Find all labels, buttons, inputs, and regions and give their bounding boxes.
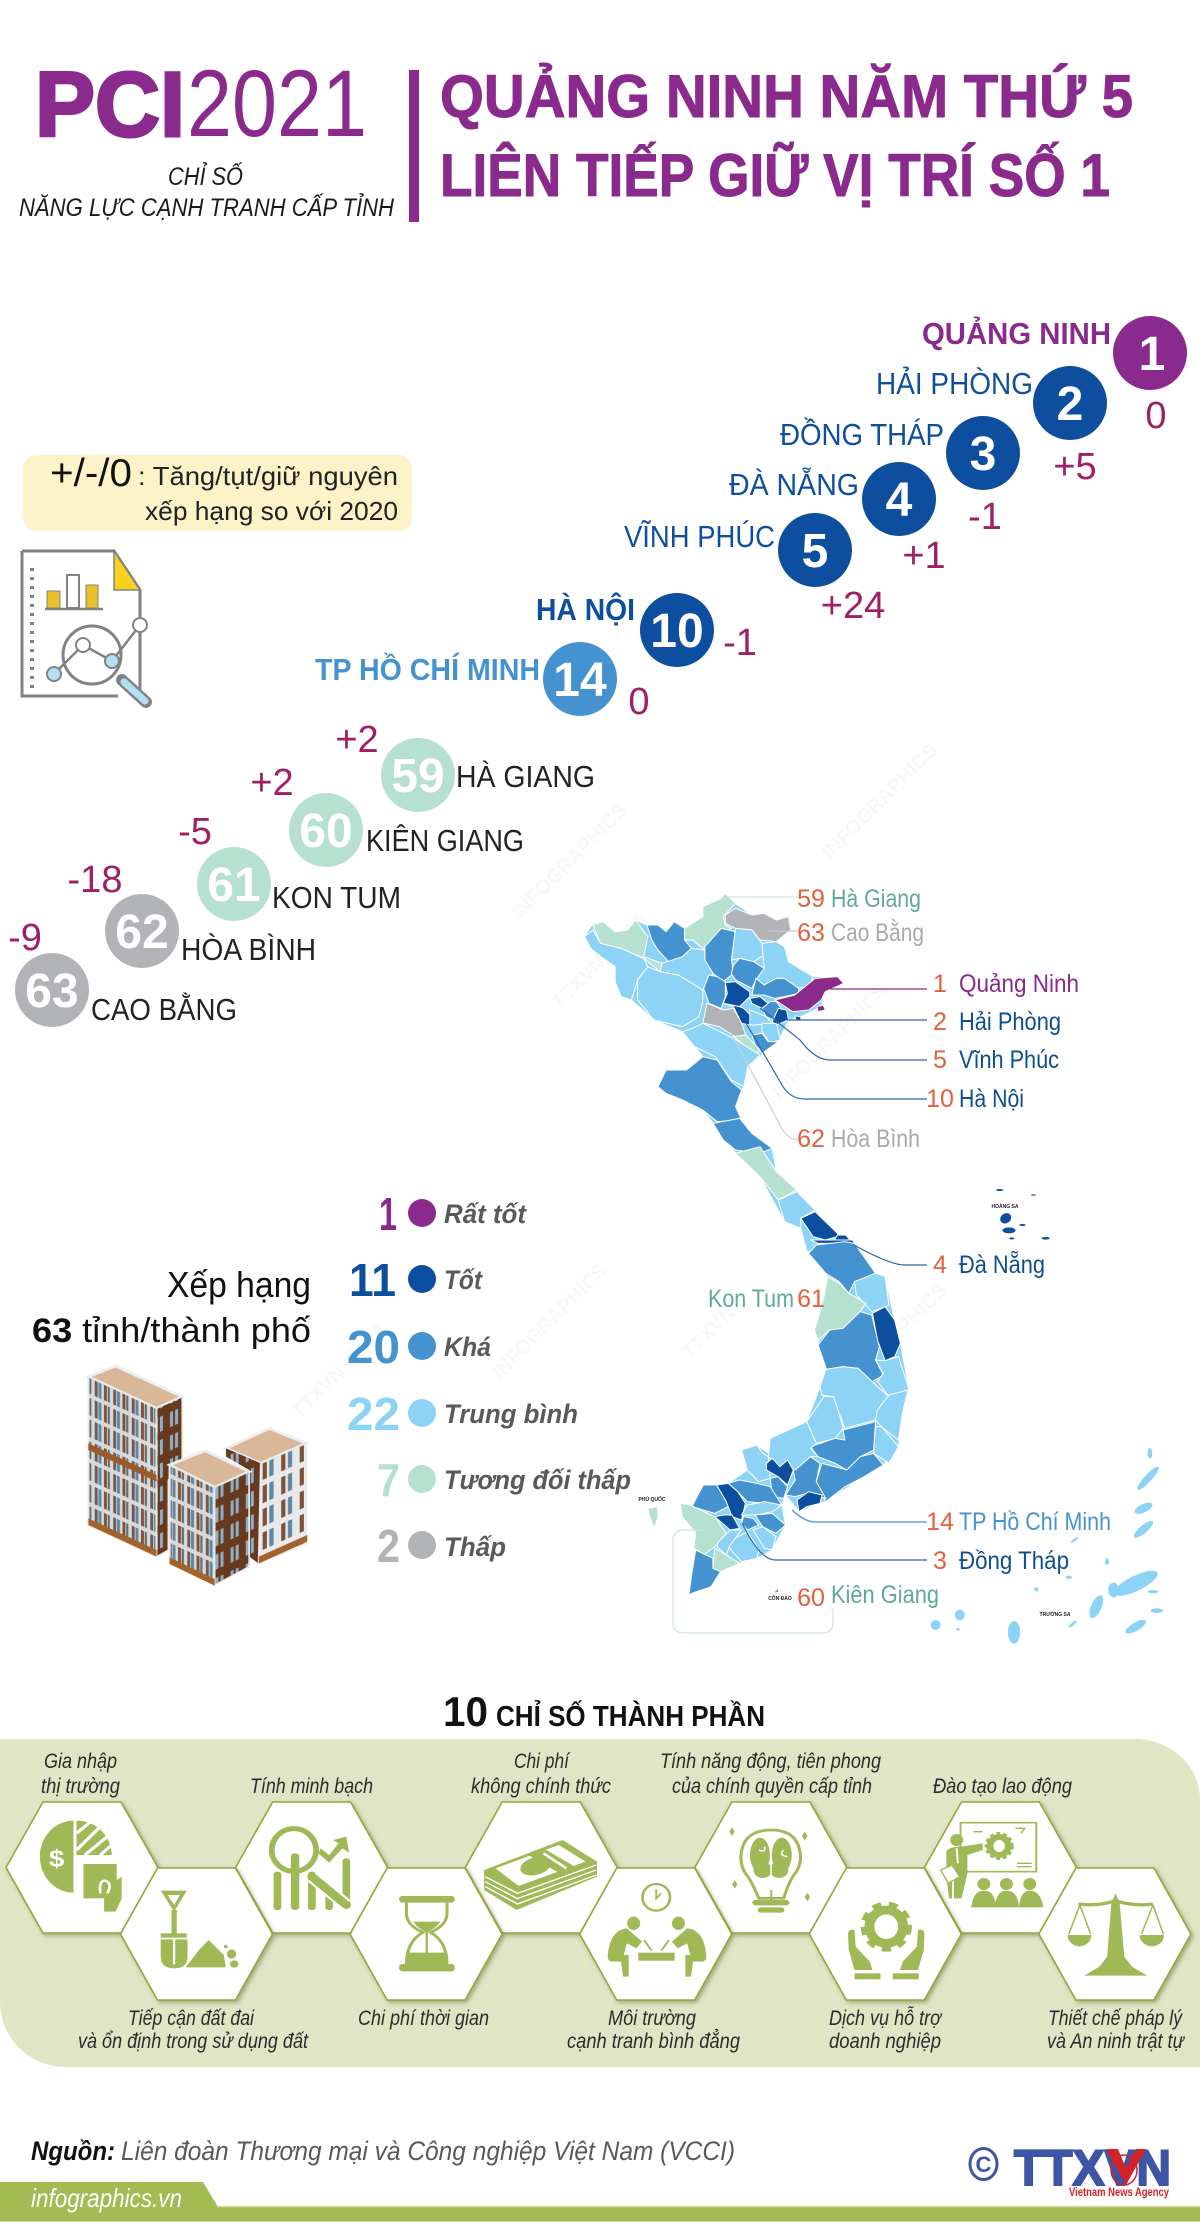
map label: Hải Phòng: 2 (933, 1008, 947, 1036)
legend row: very good (379, 1188, 527, 1240)
map label: Đà Nẵng: 4 (933, 1251, 947, 1279)
icon: report with magnifier (22, 551, 147, 702)
map label: Đồng Tháp: Đồng Tháp (959, 1547, 1069, 1575)
map label: Đà Nẵng (933, 1250, 1045, 1279)
ranked: Hà Nội 10: HÀ NỘI (536, 591, 635, 627)
bottom ranked: Kon Tum 61 (178, 811, 401, 921)
bottom ranked: Hòa Bình 62 (68, 859, 316, 968)
top ranked: Hải Phòng 2: +5 (1053, 446, 1097, 488)
top ranked: Hải Phòng 2: 2 (1057, 378, 1083, 431)
caption: proactivity: của chính quyền cấp tỉnh (672, 1775, 872, 1798)
caption: business support: doanh nghiệp (829, 2030, 941, 2053)
top ranked: Vĩnh Phúc 5: 5 (802, 525, 828, 578)
caption: market entry (41, 1750, 120, 1798)
map: tiny island labels: CÔN ĐẢO (768, 1594, 792, 1602)
bottom ranked: Hà Giang 59: 59 (391, 750, 445, 803)
map label: Hà Nội: Hà Nội (959, 1085, 1024, 1113)
legend row: relatively low (377, 1454, 631, 1506)
footer bar with site name (0, 2182, 1200, 2222)
map label: Kiên Giang: Kiên Giang (831, 1581, 939, 1609)
caption: informal costs: Chi phí (514, 1750, 571, 1773)
caption: equal competition (567, 2007, 740, 2053)
top ranked: Quảng Ninh 1: 0 (1145, 395, 1167, 437)
map: leader lines (673, 897, 927, 1633)
legend row: relatively low: Tương đối thấp (444, 1465, 631, 1495)
text: INFOGRAPHICS (488, 1260, 612, 1384)
heading (440, 63, 1133, 209)
map: tiny island labels: TRƯỜNG SA (1040, 1610, 1071, 1618)
map label: Hòa Bình: 62 (797, 1125, 825, 1153)
ranked: Hà Nội 10: 10 (650, 605, 704, 658)
footer bar with site name: infographics.vn (31, 2183, 182, 2213)
ranked: TP Hồ Chí Minh 14: TP HỒ CHÍ MINH (315, 651, 540, 687)
icon: legal scales (1068, 1893, 1164, 1976)
text: TTXVN (678, 1302, 740, 1364)
map label: Hà Nội: 10 (926, 1085, 954, 1113)
text: ranking of 63 provinces (32, 1264, 311, 1350)
icon: training presenter (941, 1823, 1043, 1907)
subtitle: provincial competitiveness index: CHỈ SỐ (168, 160, 243, 191)
legend row: very good: Rất tốt (444, 1199, 527, 1229)
ranked: Hà Nội 10: -1 (723, 622, 757, 664)
icon: hourglass (399, 1896, 455, 1971)
map label: Hòa Bình (797, 1125, 920, 1153)
map label: Hòa Bình: Hòa Bình (831, 1125, 920, 1153)
caption: proactivity (660, 1750, 881, 1798)
top ranked: Đà Nẵng 4: 4 (886, 474, 913, 527)
caption: transparency: Tính minh bạch (250, 1775, 373, 1798)
bottom ranked: Cao Bằng 63: CAO BẰNG (91, 992, 237, 1027)
map: northern and central Vietnam (584, 893, 856, 1252)
map: Trường Sa islands (931, 1448, 1163, 1644)
map label: TP Hồ Chí Minh: TP Hồ Chí Minh (959, 1508, 1111, 1536)
legend row: fair: Khá (444, 1332, 491, 1362)
map label: TP Hồ Chí Minh: 14 (926, 1508, 954, 1536)
callout: legend for rank change: +/-/0 (50, 452, 132, 495)
icon: market entry: $ (49, 1846, 64, 1872)
bottom ranked: Kiên Giang 60: KIÊN GIANG (366, 823, 524, 858)
map label: Cao Bằng: 63 (797, 919, 825, 947)
icon: market entry (40, 1821, 122, 1912)
map label: Quảng Ninh: 1 (933, 970, 947, 998)
map: tiny island labels (639, 1203, 1071, 1618)
ranked: TP Hồ Chí Minh 14: 14 (553, 654, 607, 707)
legend row: very good: 1 (379, 1188, 397, 1240)
legend row: low: 2 (377, 1520, 400, 1572)
caption: legal institutions (1047, 2007, 1185, 2053)
icon: land access shovel (161, 1891, 238, 1968)
top ranked: Đồng Tháp 3: 3 (970, 428, 996, 481)
panel: component indices background (0, 1739, 1200, 2067)
bottom ranked: Hòa Bình 62: -18 (68, 859, 122, 901)
caption: labor training: Đào tạo lao động (933, 1775, 1072, 1798)
top ranked: Quảng Ninh 1 (922, 316, 1187, 437)
logo: TTXVN: Vietnam News Agency (1069, 2185, 1169, 2199)
map label: Hà Giang (797, 885, 921, 913)
map: central highlands and south Vietnam (648, 1240, 909, 1595)
bottom ranked: Kon Tum 61: -5 (178, 811, 212, 853)
caption: land access: và ổn định trong sử dụng đất (78, 2030, 309, 2053)
subtitle: provincial competitiveness index: NĂNG LỰC CẠNH TRANH CẤP TỈNH (19, 191, 395, 222)
bottom ranked: Kon Tum 61: KON TUM (272, 880, 401, 915)
map: tiny island labels: HOÀNG SA (992, 1203, 1019, 1210)
top ranked: Đà Nẵng 4: +1 (902, 535, 946, 577)
legend row: relatively low: 7 (377, 1454, 400, 1506)
bottom ranked: Cao Bằng 63: 63 (25, 965, 79, 1018)
legend row: average: 22 (347, 1388, 400, 1440)
text: INFOGRAPHICS (508, 800, 632, 924)
legend row: fair: 20 (347, 1321, 400, 1373)
legend row: low (377, 1520, 506, 1572)
icon: level playing field, two people at a table (608, 1884, 706, 1977)
logo: TTXVN: TTXVN (1014, 2140, 1171, 2196)
legend row: good: Tốt (444, 1265, 483, 1295)
bottom ranked: Hòa Bình 62: HÒA BÌNH (181, 932, 316, 967)
map label: Hải Phòng: Hải Phòng (959, 1008, 1061, 1036)
caption: business support: Dịch vụ hỗ trợ (829, 2007, 943, 2030)
map label: Hà Nội (926, 1085, 1024, 1113)
icon: money stack (484, 1840, 597, 1910)
top ranked: Đà Nẵng 4: ĐÀ NẴNG (729, 466, 859, 502)
bottom ranked: Kon Tum 61: 61 (207, 859, 261, 912)
map label: Đà Nẵng: Đà Nẵng (959, 1250, 1045, 1279)
callout: legend for rank change: : Tăng/tụt/giữ nguyên (138, 461, 398, 491)
map label: Vĩnh Phúc: 5 (933, 1046, 947, 1074)
heading: 10 component indices: CHỈ SỐ THÀNH PHẦN (496, 1699, 765, 1733)
text: INFOGRAPHICS (828, 1280, 952, 1404)
legend row: fair (347, 1321, 491, 1373)
bottom ranked: Cao Bằng 63 (8, 917, 237, 1027)
top ranked: Đồng Tháp 3: ĐỒNG THÁP (780, 416, 944, 452)
subtitle: provincial competitiveness index (19, 160, 395, 222)
icon: transparency magnifier (272, 1829, 350, 1910)
map label: Đồng Tháp: 3 (933, 1547, 947, 1575)
map label: Hà Giang: 59 (797, 885, 825, 913)
bottom ranked: Hà Giang 59: HÀ GIANG (456, 759, 595, 794)
map label: Hà Giang: Hà Giang (831, 885, 921, 913)
legend row: average: Trung bình (444, 1399, 578, 1429)
text: TTXVN - VNA (548, 909, 652, 1014)
map label: Quảng Ninh: Quảng Ninh (959, 970, 1079, 998)
title: PCI 2021 logo: PCI (35, 54, 185, 156)
top ranked: Quảng Ninh 1: 1 (1139, 328, 1165, 381)
text: ranking of 63 provinces: 63 tỉnh/thành phố (32, 1312, 311, 1350)
top ranked: Đồng Tháp 3 (780, 416, 1020, 538)
caption: land access (78, 2007, 309, 2053)
icon: business support gear and hands (848, 1904, 925, 1979)
bottom ranked: Cao Bằng 63: -9 (8, 917, 42, 959)
map label: Kiên Giang: 60 (797, 1584, 825, 1612)
ranked: TP Hồ Chí Minh 14: 0 (628, 681, 650, 723)
map label: Cao Bằng: Cao Bằng (831, 918, 924, 947)
text: TTXVN - VNA (288, 1319, 392, 1424)
heading: 10 component indices (443, 1688, 765, 1735)
callout: legend for rank change: xếp hạng so với 2020 (145, 496, 398, 526)
bottom ranked: Hà Giang 59 (335, 719, 595, 812)
map: tiny island labels: PHÚ QUỐC (639, 1496, 666, 1503)
hexagon: upper row (6, 1802, 1076, 1933)
legend row: average (347, 1388, 578, 1440)
top ranked: Hải Phòng 2: HẢI PHÒNG (876, 366, 1033, 401)
caption: informal costs (471, 1750, 611, 1798)
bottom ranked: Kiên Giang 60: +2 (250, 762, 294, 804)
caption: time cost: Chi phí thời gian (358, 2007, 489, 2030)
top ranked: Vĩnh Phúc 5 (624, 513, 885, 627)
map label: Kiên Giang (797, 1581, 939, 1612)
bottom ranked: Hòa Bình 62: 62 (115, 906, 169, 959)
heading: 10 component indices: 10 (443, 1688, 488, 1735)
caption: proactivity: Tính năng động, tiên phong (660, 1750, 881, 1773)
source note: Nguồn: (31, 2136, 115, 2166)
logo: TTXVN: C (976, 2152, 992, 2177)
text: INFOGRAPHICS (818, 740, 942, 864)
map label: Kon Tum: Kon Tum (708, 1285, 794, 1313)
heading: QUẢNG NINH NĂM THỨ 5 (440, 63, 1133, 130)
heading: LIÊN TIẾP GIỮ VỊ TRÍ SỐ 1 (440, 142, 1110, 209)
top ranked: Quảng Ninh 1: QUẢNG NINH (922, 316, 1111, 351)
top ranked: Đà Nẵng 4 (729, 462, 946, 577)
caption: land access: Tiếp cận đất đai (128, 2007, 255, 2030)
map label: Cao Bằng (797, 918, 924, 947)
legend row: good (349, 1254, 483, 1306)
source note: Liên đoàn Thương mại và Công nghiệp Việt Nam (VCCI) (121, 2136, 735, 2166)
ranked: TP Hồ Chí Minh 14 (315, 642, 650, 723)
bottom ranked: Hà Giang 59: +2 (335, 719, 379, 761)
callout: legend for rank change (23, 452, 412, 531)
caption: equal competition: cạnh tranh bình đẳng (567, 2030, 740, 2053)
map: Hoàng Sa islands (996, 1189, 1050, 1240)
legend row: good: 11 (349, 1254, 396, 1306)
caption: informal costs: không chính thức (471, 1775, 611, 1798)
icon: buildings (88, 1366, 307, 1586)
map label: Vĩnh Phúc: Vĩnh Phúc (959, 1046, 1059, 1074)
top ranked: Hải Phòng 2 (876, 366, 1107, 488)
caption: business support (829, 2007, 943, 2053)
title: PCI 2021 logo: 2021 (187, 51, 367, 157)
top ranked: Vĩnh Phúc 5: VĨNH PHÚC (624, 519, 775, 554)
title: PCI 2021 logo (35, 51, 367, 157)
text: ranking of 63 provinces: Xếp hạng (167, 1264, 311, 1305)
caption: market entry: Gia nhập (44, 1750, 117, 1773)
legend: category counts (347, 1188, 631, 1572)
hexagon: lower row (120, 1868, 1191, 2000)
legend row: low: Thấp (444, 1532, 506, 1562)
bottom ranked: Kiên Giang 60: 60 (299, 805, 353, 858)
text: INFOGRAPHICS (768, 980, 892, 1104)
top ranked: Đồng Tháp 3: -1 (968, 496, 1002, 538)
bottom ranked: Kiên Giang 60 (250, 762, 524, 867)
ranked: Hà Nội 10 (536, 591, 757, 667)
map label: Kon Tum: 61 (797, 1285, 825, 1313)
caption: market entry: thị trường (41, 1775, 120, 1798)
top ranked: Vĩnh Phúc 5: +24 (821, 585, 885, 627)
icon: brain light bulb (729, 1827, 810, 1913)
caption: equal competition: Môi trường (608, 2007, 696, 2030)
